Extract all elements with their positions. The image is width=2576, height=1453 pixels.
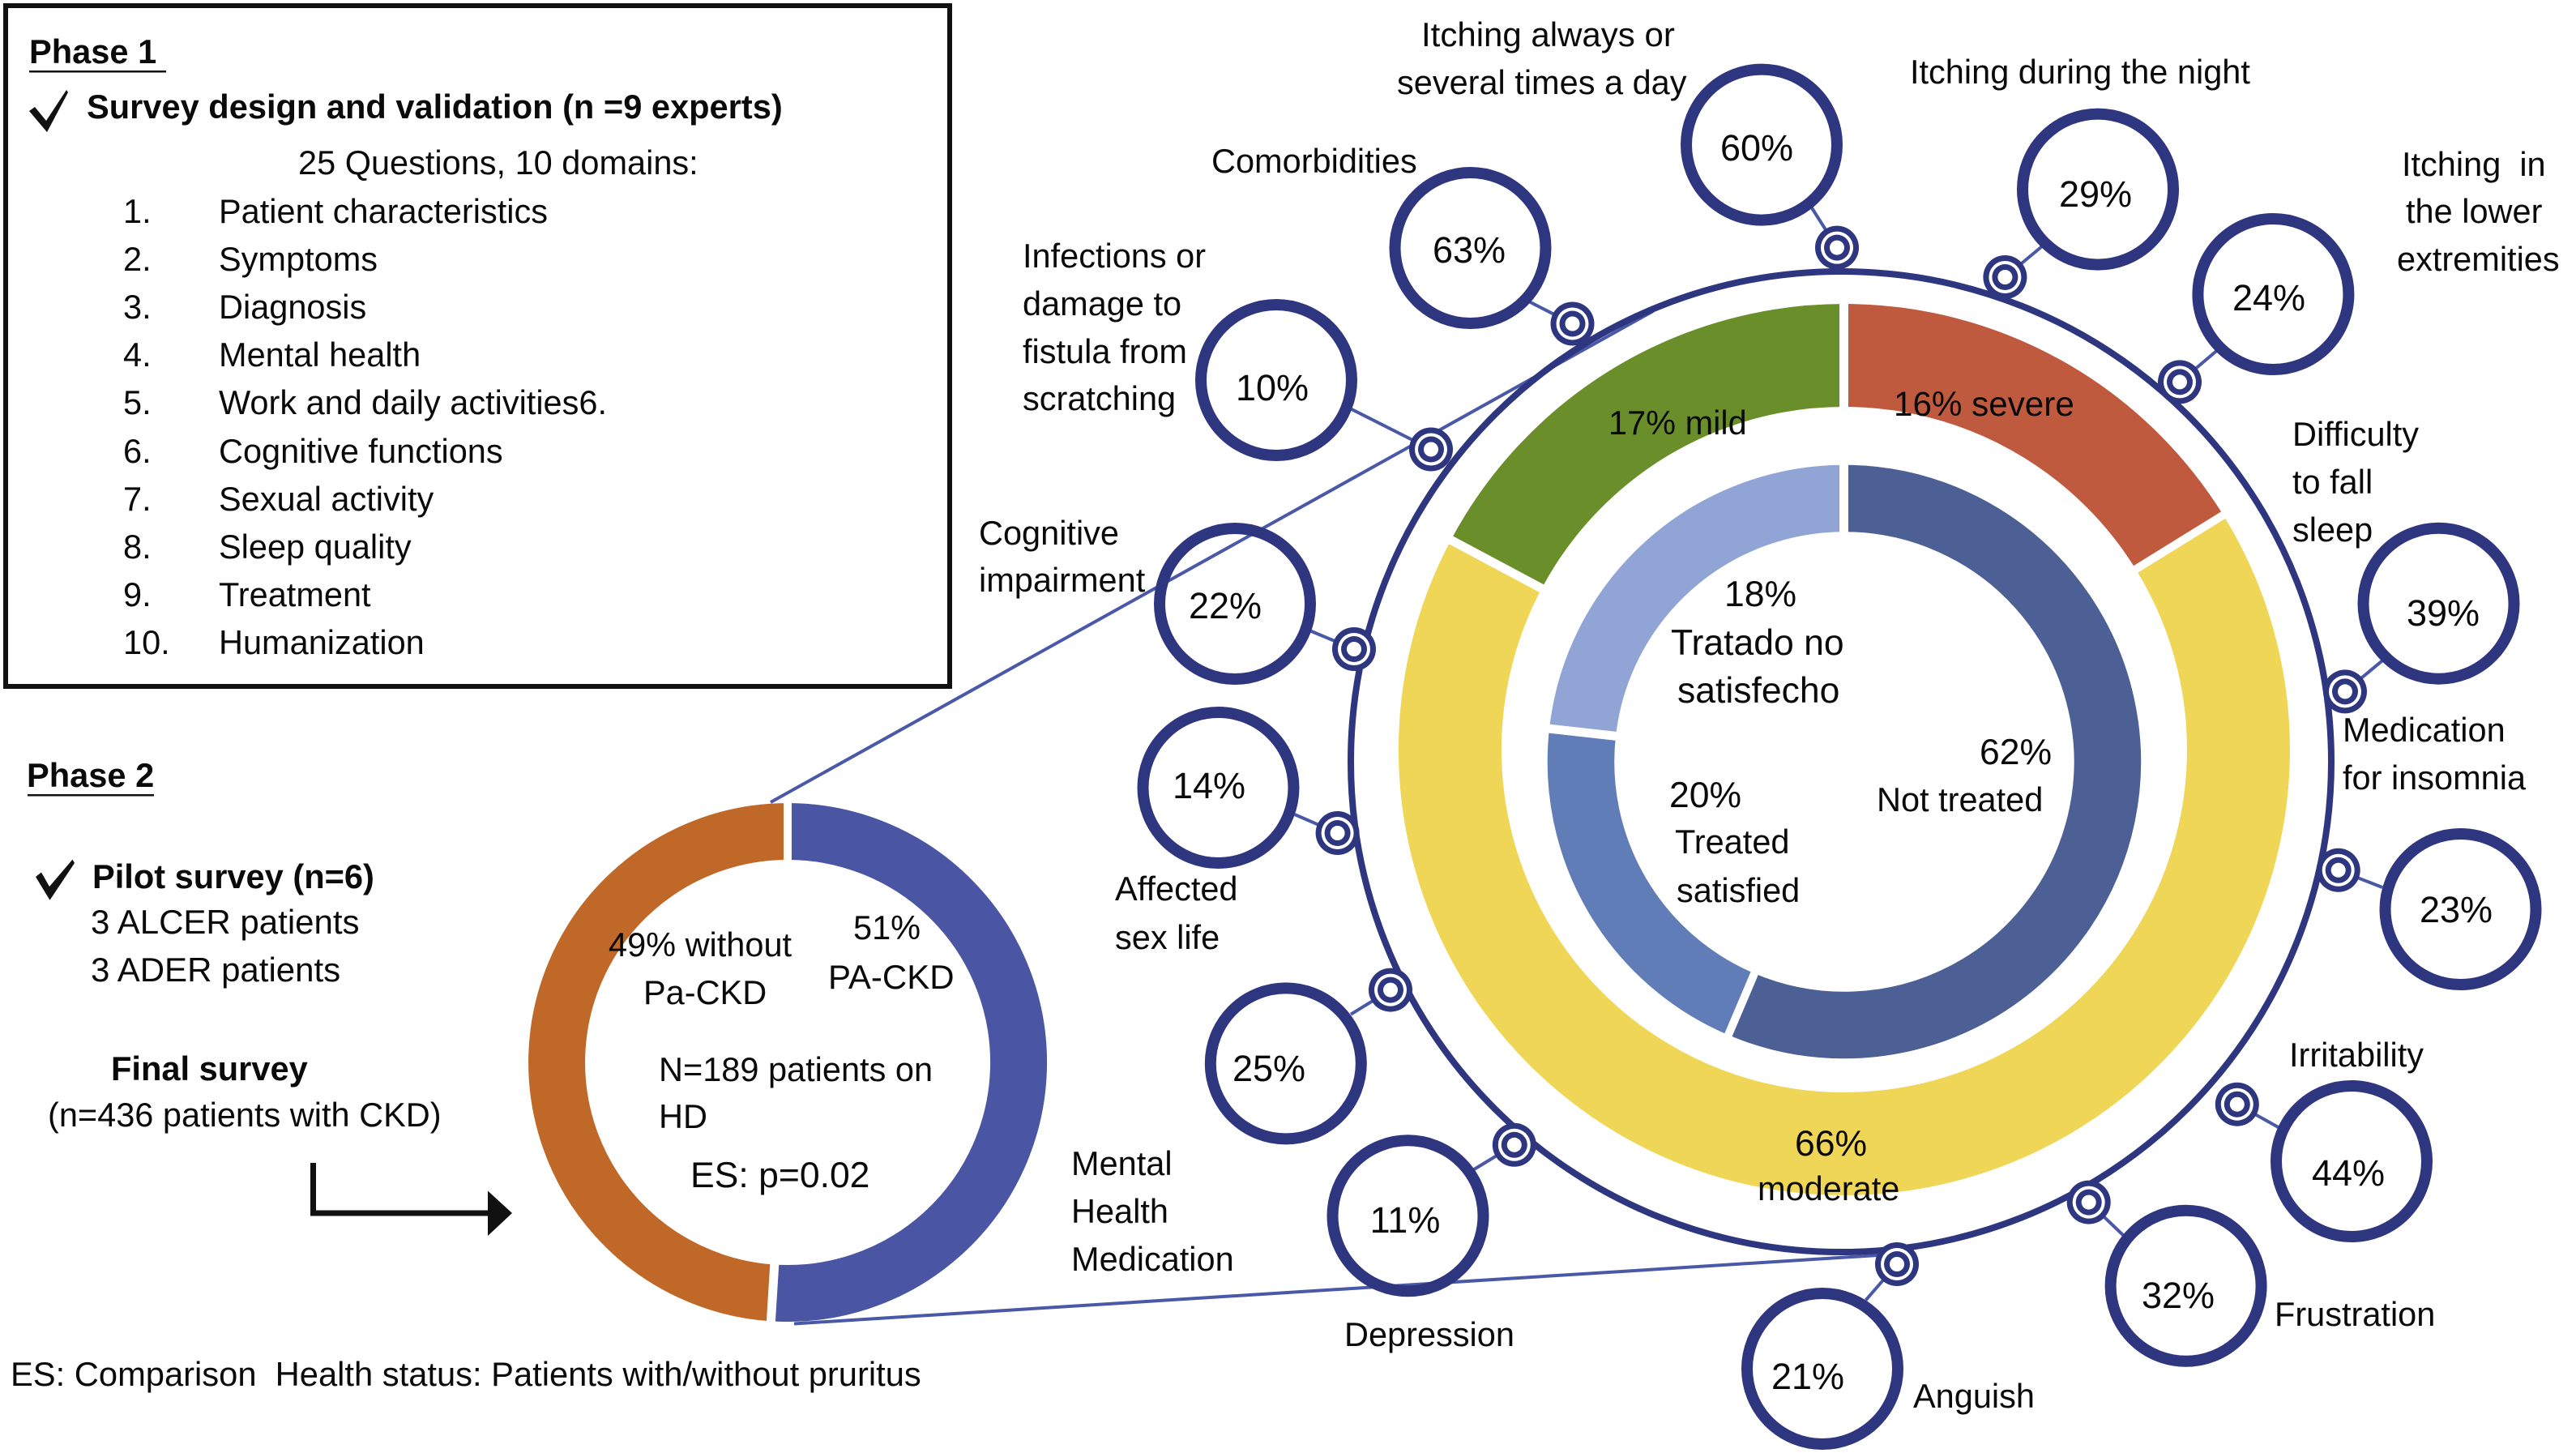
callout: depression: 11% [1370,1199,1440,1241]
label: treated satisfied: 20% [1669,776,1741,815]
label: pa-ckd [828,908,955,996]
callout: itching in lower extremities: Itching in [2402,145,2546,183]
callout: difficulty to fall sleep: Difficulty [2292,415,2419,453]
mental health medication label: Medication [1071,1240,1234,1278]
icon: check mark phase 1 [29,90,68,132]
label: moderate: 66% [1795,1124,1867,1164]
callout: medication for insomnia: Medication [2343,711,2506,749]
callout: infections or damage to fistula [1023,237,1453,472]
callout: medication for insomnia: for insomnia [2343,759,2527,797]
icon: check mark phase 2 [36,860,75,900]
donut chart: treatment [1542,458,2108,1041]
label: without pa-ckd: 49% without [609,925,792,964]
label: sample size [659,1050,933,1135]
domain list: Diagnosis [219,288,366,326]
pilot survey heading: Pilot survey (n=6) [92,857,374,895]
pilot survey patients: 3 ADER patients [91,951,340,989]
domain list: Treatment [219,575,371,613]
domain list: 2. [123,240,152,278]
label: moderate [1758,1124,1899,1207]
domain list: Mental health [219,335,421,374]
domain list: 5. [123,383,152,421]
mental health medication label: Mental [1071,1144,1173,1182]
label: not treated: Not treated [1877,780,2043,818]
callout: itching always [1397,15,1859,270]
callout: itching during the night: Itching during the night [1910,53,2250,91]
callout: itching in lower extremities: the lower [2406,192,2543,230]
callout: cognitive impairment: Cognitive [979,514,1119,552]
mental health medication label [1071,1144,1234,1278]
callout: anguish: 21% [1771,1356,1844,1397]
label: treated not satisfied: satisfecho [1677,671,1839,711]
callout: itching during the night [1910,53,2250,299]
label: treated not satisfied: 18% [1724,575,1796,614]
callout: affected sex life [1115,712,1360,956]
connector lines to main chart [771,311,1878,1324]
callout: itching always: 60% [1720,127,1793,169]
label: treated not satisfied: Tratado no [1671,623,1844,663]
final survey heading: Final survey [111,1049,308,1088]
label: mild: 17% mild [1608,404,1747,442]
pilot survey patients [91,903,360,989]
callout: itching always: several times a day [1397,63,1687,101]
callout: irritability: 44% [2312,1152,2385,1194]
callout: difficulty to fall sleep: 39% [2407,592,2480,634]
callout: difficulty to fall sleep: sleep [2292,511,2373,549]
footnote: ES: Comparison Health status: Patients with/without pruritus [11,1355,921,1393]
callout: itching during the night: 29% [2059,173,2132,215]
domain list: 6. [123,432,152,470]
panel: phase 2 [11,756,921,1393]
label: pa-ckd: PA-CKD [828,958,955,996]
callout: infections or damage to fistula: Infections or [1023,237,1206,275]
domain list: Sexual activity [219,480,434,518]
callout: difficulty to fall sleep: to fall [2292,463,2373,501]
main outer ring [1351,271,2331,1252]
heading: phase 1: Phase 1 [29,32,156,71]
callout: depression: Depression [1344,1315,1514,1353]
label: effect size: ES: p=0.02 [690,1156,869,1195]
label: without pa-ckd: Pa-CKD [643,973,767,1011]
label: sample size: HD [659,1097,707,1135]
callout: infections or damage to fistula: fistula from [1023,332,1187,370]
questions subtitle: 25 Questions, 10 domains: [298,143,698,182]
callout: cognitive impairment: impairment [979,561,1146,599]
domain list: 1. [123,192,152,230]
callout: anguish: Anguish [1913,1377,2035,1415]
domain list: Symptoms [219,240,378,278]
label: not treated [1877,733,2052,818]
callout: affected sex life: Affected [1115,870,1238,908]
callout: depression [1332,1123,1536,1353]
domain list: 9. [123,575,152,613]
domain list: Sleep quality [219,528,412,566]
survey design heading: Survey design and validation (n =9 experts) [87,88,783,126]
callout: medication for insomnia [2317,711,2536,985]
final survey size: (n=436 patients with CKD) [48,1096,442,1134]
label: moderate: moderate [1758,1169,1899,1207]
callout: affected sex life: sex life [1115,918,1220,956]
label: treated satisfied: satisfied [1677,871,1800,909]
callout: cognitive impairment [979,514,1376,679]
label: treated satisfied: Treated [1675,823,1789,861]
donut chart: severity [1446,296,2238,1207]
callout: comorbidities [1211,142,1595,345]
domain list: Work and daily activities6. [219,383,607,421]
callout: itching always: Itching always or [1421,15,1675,53]
callout: infections or damage to fistula: scratching [1023,379,1176,417]
callout: frustration [2067,1181,2435,1361]
domain list: Humanization [219,623,425,661]
callout: frustration: 32% [2142,1275,2215,1316]
label: sample size: N=189 patients on [659,1050,933,1088]
heading: phase 2: Phase 2 [27,756,154,794]
domain list: Cognitive functions [219,432,503,470]
callout: anguish [1747,1242,2035,1444]
callout: itching in lower extremities [2158,145,2560,404]
domain list [123,192,607,661]
label: not treated: 62% [1980,733,2052,772]
domain list: 10. [123,623,170,661]
donut chart: pruritus prevalence [557,798,1019,1329]
callout: frustration: Frustration [2275,1295,2435,1333]
pilot survey patients: 3 ALCER patients [91,903,360,941]
arrow to pruritus donut [313,1163,512,1236]
label: without pa-ckd [609,925,792,1011]
callout: itching in lower extremities: 24% [2232,277,2305,318]
callout: difficulty to fall sleep [2292,415,2514,713]
callout: irritability [2215,1036,2427,1237]
callout: affected sex life: 14% [1173,765,1245,806]
label: treated not satisfied [1671,575,1844,711]
label: treated satisfied [1669,776,1800,909]
mental health medication label: Health [1071,1192,1168,1230]
callout: comorbidities: 63% [1433,229,1506,271]
callout: mental health medication value [1211,968,1412,1139]
domain list: 4. [123,335,152,374]
panel: phase 1 [6,6,950,686]
domain list: 8. [123,528,152,566]
callout: medication for insomnia: 23% [2420,889,2493,930]
label: severe: 16% severe [1894,385,2074,423]
domain list: Patient characteristics [219,192,548,230]
domain list: 7. [123,480,152,518]
callout: itching in lower extremities: extremities [2397,240,2560,278]
domain list: 3. [123,288,152,326]
callout: mental health medication value: 25% [1232,1048,1305,1089]
callout: cognitive impairment: 22% [1189,585,1262,626]
callout: infections or damage to fistula: damage to [1023,284,1181,323]
callout: comorbidities: Comorbidities [1211,142,1417,180]
label: pa-ckd: 51% [853,908,921,947]
callout: irritability: Irritability [2289,1036,2424,1074]
callout: infections or damage to fistula: 10% [1236,367,1309,408]
